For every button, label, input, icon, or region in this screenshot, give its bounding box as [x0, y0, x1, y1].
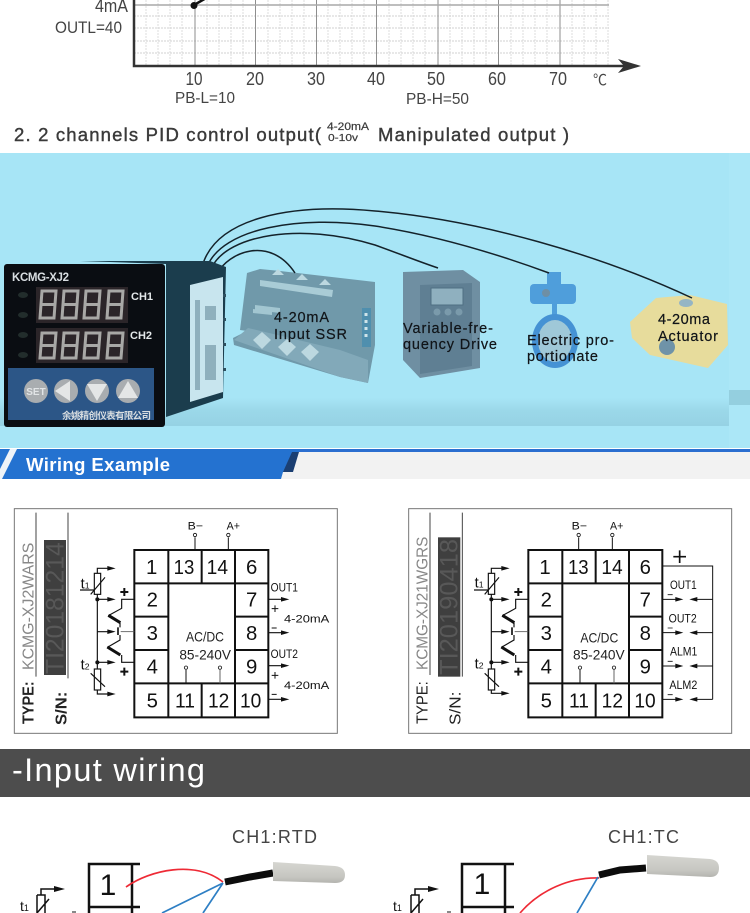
terminal block: 6	[246, 557, 257, 579]
y axis label OUTL: OUTL=40	[55, 18, 122, 37]
nameplate: TYPE:	[414, 681, 431, 724]
section heading: 2 channels PID control output: 0-10v	[328, 132, 359, 144]
controller front panel	[4, 264, 165, 427]
sensor symbol t1	[20, 886, 76, 913]
outputs: 4-20mA	[284, 680, 330, 692]
device labels: portionate	[527, 349, 598, 365]
device labels: 4-20mA	[274, 310, 329, 326]
sensor inputs: t2	[475, 656, 484, 672]
x axis tick labels: 50	[427, 69, 445, 89]
signal wires	[202, 209, 692, 298]
relay outputs with common: OUT2	[669, 611, 697, 625]
power supply terminals	[573, 630, 626, 683]
terminal block: 10	[240, 690, 261, 712]
communication terminals	[188, 520, 240, 550]
device: electric proportional valve	[530, 272, 578, 368]
power supply terminals: 85-240V	[573, 647, 626, 662]
sensor probe	[225, 862, 345, 883]
x axis tick labels: 30	[307, 69, 325, 89]
input wiring: CH1 RTD	[20, 827, 345, 913]
power supply terminals: AC/DC	[186, 630, 224, 645]
communication terminals	[572, 520, 623, 550]
device labels	[274, 310, 718, 365]
terminal 1	[89, 864, 140, 913]
terminal block: 6	[640, 557, 651, 579]
sensor symbol t1	[393, 886, 451, 913]
terminal block: 4	[147, 656, 158, 678]
nameplate	[20, 513, 71, 725]
nameplate: KCMG-XJ21WGRS	[414, 537, 431, 670]
button panel	[8, 368, 154, 420]
device: SSR	[233, 269, 375, 383]
sensor inputs	[80, 566, 134, 696]
display CH2	[36, 328, 128, 363]
terminal block	[528, 550, 662, 717]
PB-H label: PB-H=50	[406, 91, 469, 108]
terminal block: 3	[541, 623, 552, 645]
terminal 1: 1	[474, 868, 490, 901]
temperature output chart	[55, 0, 641, 108]
terminal block: 12	[602, 690, 623, 712]
sensor wires	[126, 869, 223, 913]
device labels: Actuator	[658, 329, 718, 345]
nameplate	[414, 513, 465, 725]
manufacturer name: 余姚精创仪表有限公司	[62, 410, 151, 422]
device labels: quency Drive	[403, 337, 497, 353]
terminal block: 11	[569, 690, 589, 712]
device labels: 4-20ma	[658, 312, 711, 328]
wiring diagram: KCMG-XJ21WGRS	[409, 509, 732, 733]
terminal 1: 1	[100, 869, 116, 902]
PB-L label: PB-L=10	[175, 90, 235, 107]
terminal block: 9	[640, 656, 651, 678]
terminal block: 13	[568, 557, 589, 579]
device: actuator	[630, 295, 728, 368]
power supply terminals	[179, 630, 232, 683]
label CH1:RTD: CH1:RTD	[232, 827, 317, 847]
terminal block: 14	[601, 557, 623, 579]
terminal block: 3	[147, 623, 158, 645]
sensor wires	[520, 877, 599, 913]
terminal block: 8	[246, 623, 257, 645]
section heading: 2 channels PID control output: 2. 2 channels PID control output(	[14, 124, 322, 145]
section header: Wiring Example: Wiring Example	[26, 454, 170, 475]
terminal block: 1	[539, 557, 551, 579]
chart curve start point	[194, 0, 208, 5]
terminal block: 2	[147, 590, 158, 612]
terminal block: 2	[541, 590, 552, 612]
outputs	[268, 580, 330, 702]
display CH1	[36, 287, 128, 323]
terminal block: 8	[640, 623, 651, 645]
section heading: 2 channels PID control output: Manipulated output )	[378, 124, 569, 145]
chart axes	[134, 0, 641, 73]
power supply terminals: 85-240V	[179, 647, 232, 662]
device labels: Electric pro-	[527, 333, 614, 349]
x axis tick labels: ℃	[593, 72, 607, 89]
indicator lights	[18, 292, 28, 358]
device labels: Input SSR	[274, 327, 347, 343]
terminal block: 14	[207, 557, 228, 579]
terminal block: 5	[541, 690, 552, 712]
power supply terminals: AC/DC	[580, 630, 618, 645]
terminal block: 1	[146, 557, 157, 579]
controller body side	[80, 261, 226, 417]
terminal block: 4	[541, 656, 552, 678]
x axis tick labels: 60	[488, 69, 506, 89]
x axis tick labels: 70	[549, 69, 567, 89]
nameplate: KCMG-XJ2WARS	[20, 543, 37, 670]
sensor inputs: t1	[81, 576, 90, 592]
communication terminals: B−	[188, 520, 203, 532]
section heading: 2 channels PID control output	[14, 121, 569, 145]
model label: KCMG-XJ2	[12, 272, 69, 284]
relay outputs with common: ALM2	[669, 678, 698, 692]
section banner: Input wiring: -Input wiring	[12, 752, 205, 788]
outputs: OUT1	[271, 580, 298, 594]
nameplate: TYPE:	[20, 681, 37, 724]
device labels: Variable-fre-	[403, 321, 493, 337]
outputs: 4-20mA	[284, 613, 330, 625]
terminal block: 7	[246, 590, 257, 612]
terminal block: 9	[246, 656, 257, 678]
x axis tick labels	[186, 69, 607, 89]
relay outputs with common: OUT1	[670, 578, 697, 592]
sensor inputs	[474, 566, 528, 696]
terminal block: 10	[634, 690, 656, 712]
nameplate: S/N:	[448, 692, 465, 725]
wiring diagram: KCMG-XJ2WARS	[14, 509, 337, 733]
terminal block: 12	[208, 690, 229, 712]
device: variable frequency drive	[403, 270, 480, 378]
terminal block: 11	[175, 690, 195, 712]
label CH1: CH1	[131, 291, 153, 303]
relay outputs with common: ALM1	[670, 644, 698, 658]
photo panel: controller and output devices	[0, 153, 750, 448]
terminal block	[134, 550, 268, 717]
communication terminals: B−	[572, 520, 587, 532]
relay outputs with common	[662, 550, 713, 702]
section heading: 2 channels PID control output: 4-20mA	[327, 121, 370, 133]
x axis tick labels: 40	[367, 69, 385, 89]
section banner: Input wiring	[0, 749, 750, 797]
terminal block: 5	[147, 690, 158, 712]
terminal 1	[462, 864, 514, 913]
communication terminals: A+	[227, 520, 240, 532]
x axis tick labels: 10	[186, 69, 202, 89]
sensor inputs: t1	[475, 575, 484, 591]
terminal block: 13	[174, 557, 194, 579]
section header: Wiring Example	[0, 449, 750, 479]
label CH2: CH2	[130, 330, 152, 342]
sensor inputs: t2	[81, 657, 90, 673]
input wiring: CH1 TC	[393, 827, 719, 913]
communication terminals: A+	[610, 520, 623, 532]
nameplate: TI20190418	[435, 539, 463, 675]
sensor probe	[599, 855, 719, 877]
label CH1:TC: CH1:TC	[608, 827, 679, 847]
x axis tick labels: 20	[246, 69, 264, 89]
button panel: SET	[26, 387, 46, 398]
nameplate: S/N:	[54, 692, 71, 725]
nameplate: TI20181214	[41, 542, 69, 674]
terminal block: 7	[640, 590, 651, 612]
outputs: OUT2	[271, 647, 298, 661]
